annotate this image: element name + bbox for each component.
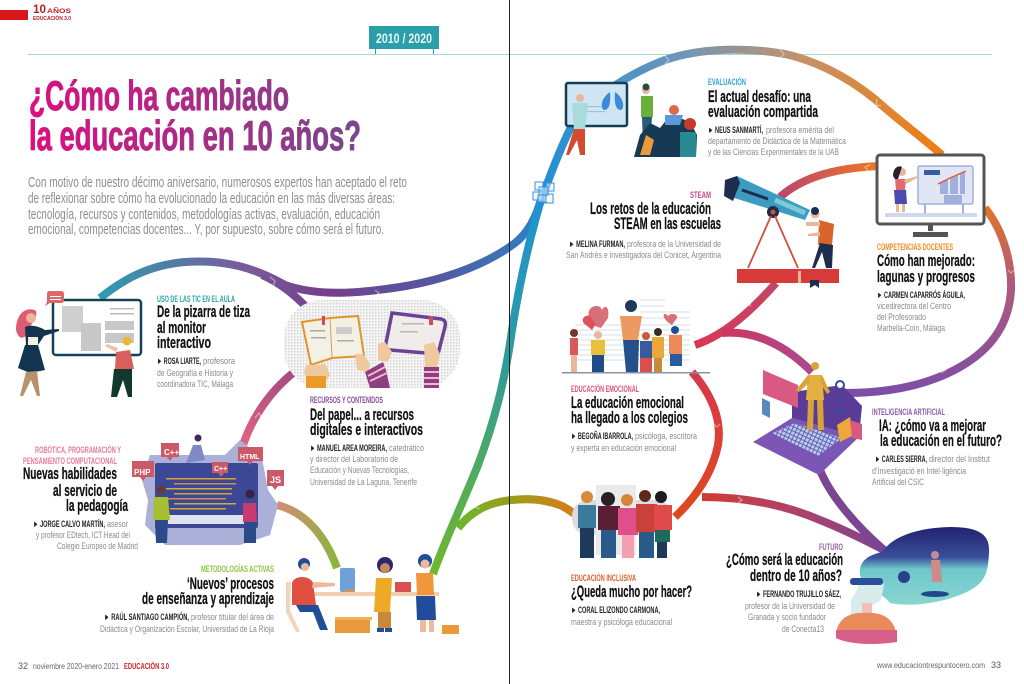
text: futuro: ¿Cómo será la educación xyxy=(726,550,843,569)
footer left: noviembre 2020-enero 2021 xyxy=(33,662,119,671)
text: futuro: de Conecta13 xyxy=(782,624,824,635)
text: STEAM: STEAM xyxy=(690,190,711,200)
text: educación inclusiva: EDUCACIÓN INCLUSIVA xyxy=(571,572,636,583)
network node icon xyxy=(533,182,554,203)
magazine header: 10 años: EDUCACIÓN 3.0 xyxy=(33,14,71,22)
intro paragraph: tecnología, recursos y contenidos, metodologías activas, evaluación, educación xyxy=(28,206,380,223)
text: educación emocional: ha llegado a los colegios xyxy=(571,408,688,427)
text: robótica y programación: ROBÓTICA, PROGRAMACIÓN Y xyxy=(35,444,121,455)
text: recursos y contenidos: Educación y Nuevas Tecnologías, xyxy=(310,465,409,476)
illustration: coding screen with language bubbles: C++ xyxy=(214,466,227,473)
text: recursos y contenidos: digitales e interactivos xyxy=(310,420,423,439)
text: futuro xyxy=(726,542,843,635)
text: robótica y programación: ► JORGE CALVO MARTÍN, xyxy=(33,519,105,530)
text: STEAM: ► MELINA FURMAN, xyxy=(569,239,625,250)
text: recursos y contenidos: Del papel... a recursos xyxy=(310,405,414,424)
connecting coloured ribbons xyxy=(100,50,1011,574)
ribbon chevrons xyxy=(255,50,1014,509)
magazine header: 10 años xyxy=(0,2,71,22)
text: evaluación: departamento de Didáctica de la Matemática xyxy=(708,136,847,147)
text: educación emocional: La educación emocional xyxy=(571,393,684,412)
text: evaluación: EVALUACIÓN xyxy=(708,76,746,87)
illustration: coding screen with language bubbles: JS xyxy=(270,475,281,485)
text: inteligencia artificial: d’Investigació en Intel·ligència xyxy=(872,466,967,477)
magazine header: 10 años: AÑOS xyxy=(47,8,71,15)
date tab 2010 / 2020: 2010 / 2020 xyxy=(376,31,432,46)
text: STEAM: Los retos de la educación xyxy=(590,199,711,218)
text: futuro: Granada y socio fundador xyxy=(748,612,826,623)
text: competencias docentes xyxy=(877,242,975,334)
text: educación emocional: ► BEGOÑA IBARROLA, xyxy=(571,431,633,442)
text: recursos y contenidos: catedrático xyxy=(389,443,424,454)
title: ¿Cómo ha cambiado xyxy=(29,72,289,119)
illustration: coding screen with language bubbles xyxy=(132,434,284,545)
illustration: laptop with robot xyxy=(753,362,862,475)
text: educación inclusiva: ¿Queda mucho por hacer? xyxy=(571,582,692,601)
vertical page gutter xyxy=(509,0,510,684)
text: uso de las TIC: ► ROSA LIARTE, xyxy=(157,356,201,367)
footer right: 33 xyxy=(991,660,1001,671)
text: robótica y programación: Colegio Europeo de Madrid xyxy=(57,541,138,552)
text: educación inclusiva: maestra y psicóloga educacional xyxy=(571,617,672,628)
illustration: teacher at interactive board xyxy=(16,291,141,397)
illustration: future VR dream cloud xyxy=(836,527,989,644)
horizontal rule xyxy=(28,54,992,55)
illustration: telescope on red book xyxy=(724,176,839,288)
illustration: collaborative table with robot xyxy=(286,554,459,634)
intro paragraph xyxy=(28,174,407,238)
text: STEAM: profesora de la Universidad de xyxy=(627,239,721,250)
text: inteligencia artificial: INTELIGENCIA ARTIFICIAL xyxy=(872,407,945,417)
text: robótica y programación: PENSAMIENTO COMPUTACIONAL xyxy=(23,456,117,466)
text: evaluación xyxy=(708,76,847,158)
illustration: book and tablet on dotted cloud xyxy=(284,300,460,388)
text: uso de las TIC: USO DE LAS TIC EN EL AULA xyxy=(157,294,235,304)
text: robótica y programación: al servicio de xyxy=(53,481,117,500)
text: competencias docentes: COMPETENCIAS DOCENTES xyxy=(877,242,953,252)
text: educación inclusiva xyxy=(571,572,692,628)
title xyxy=(29,72,361,159)
text: recursos y contenidos: Universidad de La Laguna, Tenerife xyxy=(310,477,417,488)
text: robótica y programación: y profesor EDtech, ICT Head del xyxy=(36,530,130,541)
text: STEAM xyxy=(566,190,722,261)
text: inteligencia artificial xyxy=(872,407,1002,488)
intro paragraph: de reflexionar sobre cómo ha evolucionado la educación en las más diversas áreas: xyxy=(28,190,395,207)
text: metodologías activas: ► RAÚL SANTIAGO CAMPIÓN, xyxy=(104,611,189,623)
text: robótica y programación: asesor xyxy=(107,519,128,530)
illustration: coding screen with language bubbles: C++ xyxy=(164,448,179,457)
text: futuro: dentro de 10 años? xyxy=(750,566,842,585)
text: uso de las TIC: profesora xyxy=(203,356,236,367)
text: recursos y contenidos: ► MANUEL AREA MOREIRA, xyxy=(310,443,387,454)
text: competencias docentes: vicedirectora del Centro xyxy=(877,301,951,312)
text: STEAM: San Andrés e investigadora del Conicet, Argentina xyxy=(566,250,722,261)
text: robótica y programación: la pedagogía xyxy=(66,496,128,515)
illustration: monitor with teacher and chart xyxy=(877,155,984,237)
text: metodologías activas: profesor titular del área de xyxy=(191,612,274,623)
text: recursos y contenidos: y director del Laboratorio de xyxy=(310,454,398,465)
text: evaluación: y de las Ciencias Experimentales de la UAB xyxy=(708,147,839,158)
text: educación emocional: psicóloga, escritora xyxy=(635,431,698,442)
text: uso de las TIC xyxy=(157,294,250,390)
text: futuro: FUTURO xyxy=(819,542,843,552)
text: recursos y contenidos: RECURSOS Y CONTENIDOS xyxy=(310,395,383,405)
illustration: children with hearts xyxy=(562,300,710,374)
text: robótica y programación: Nuevas habilidades xyxy=(23,464,117,483)
date tab 2010 / 2020 xyxy=(369,26,439,54)
text: competencias docentes: del Profesorado xyxy=(877,312,926,323)
text: metodologías activas xyxy=(100,564,275,635)
text: uso de las TIC: De la pizarra de tiza xyxy=(157,302,250,321)
text: educación emocional: y experta en educación emocional xyxy=(571,443,676,454)
text: metodologías activas: de enseñanza y aprendizaje xyxy=(142,589,274,608)
text: inteligencia artificial: ► CARLES SIERRA, xyxy=(875,454,927,465)
text: competencias docentes: Marbella-Coín, Málaga xyxy=(877,323,945,334)
text: robótica y programación xyxy=(23,444,138,552)
illustration: children hugging from behind xyxy=(572,485,672,558)
text: educación emocional: EDUCACIÓN EMOCIONAL xyxy=(571,383,639,394)
magazine header: 10 años: 10 xyxy=(33,2,46,16)
text: inteligencia artificial: Artificial del CSIC xyxy=(872,477,924,488)
text: evaluación: evaluación compartida xyxy=(708,102,818,121)
text: recursos y contenidos xyxy=(310,395,424,488)
footer left: EDUCACIÓN 3.0 xyxy=(124,662,169,671)
illustration: coding screen with language bubbles: HTML xyxy=(240,454,260,461)
text: evaluación: profesora emérita del xyxy=(766,125,834,136)
illustration: coding screen with language bubbles: PHP xyxy=(134,468,151,477)
footer right: www.educaciontrespuntocero.com xyxy=(876,661,985,670)
text: futuro: ► FERNANDO TRUJILLO SÁEZ, xyxy=(756,589,841,600)
text: uso de las TIC: al monitor xyxy=(157,318,206,337)
text: evaluación: ► NEUS SANMARTÍ, xyxy=(708,125,763,136)
text: uso de las TIC: interactivo xyxy=(157,333,211,352)
text: metodologías activas: ‘Nuevos’ procesos xyxy=(187,574,274,593)
text: metodologías activas: METODOLOGÍAS ACTIVAS xyxy=(201,564,274,574)
title: la educación en 10 años? xyxy=(29,112,361,159)
intro paragraph: Con motivo de nuestro décimo aniversario, numerosos expertos han aceptado el reto xyxy=(28,174,407,191)
intro paragraph: emocional, competencias docentes... Y, por supuesto, sobre cómo será el futuro. xyxy=(28,221,384,238)
text: educación inclusiva: ► CORAL ELIZONDO CARMONA, xyxy=(571,605,660,616)
footer left xyxy=(18,661,169,672)
text: inteligencia artificial: director del Institut xyxy=(929,454,990,465)
text: educación emocional xyxy=(571,383,698,454)
footer left: 32 xyxy=(18,661,28,672)
text: STEAM: STEAM en las escuelas xyxy=(614,214,721,233)
text: uso de las TIC: coordinadora TIC, Málaga xyxy=(157,379,233,390)
text: evaluación: El actual desafío: una xyxy=(708,87,811,106)
text: metodologías activas: Didáctica y Organización Escolar, Universidad de La Rioja xyxy=(100,624,275,635)
illustration: evaluation monitor with lungs xyxy=(566,83,697,157)
text: futuro: profesor de la Universidad de xyxy=(745,601,835,612)
text: uso de las TIC: de Geografía e Historia y xyxy=(157,368,233,379)
